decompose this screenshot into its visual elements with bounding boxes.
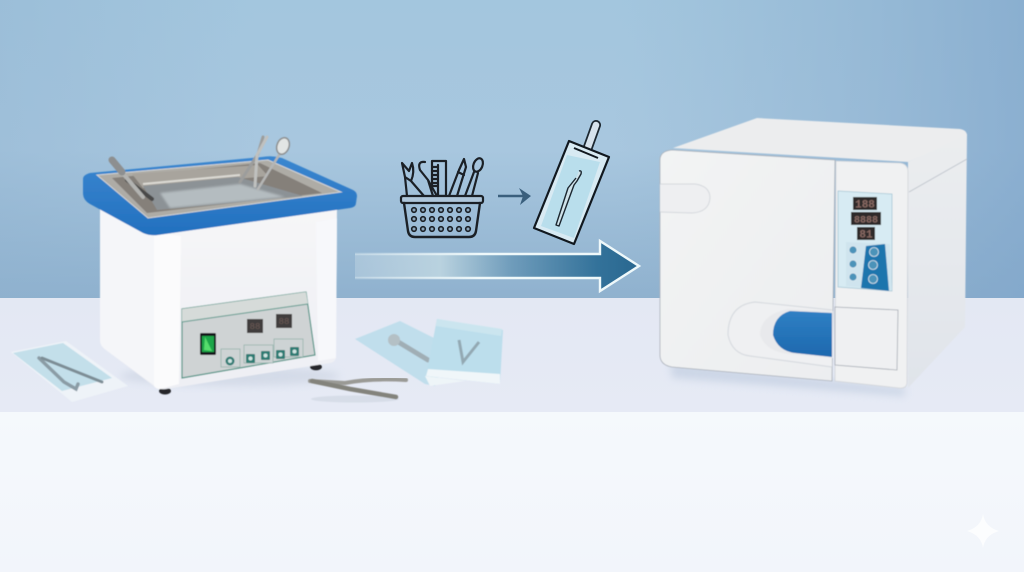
door handle [773,311,832,357]
keypad [846,242,892,291]
cleaner control panel [182,292,315,378]
sterile pouches: centre pair [355,319,503,386]
autoclave side [908,134,967,388]
arrow: large process arrow [355,241,639,291]
watermark sparkle [967,514,999,548]
blue rim and steel tank [83,156,357,235]
front pouch with forceps [426,319,503,384]
autoclave top [673,118,967,162]
arrow: basket to pouch [498,188,531,205]
back pouch with mirror [355,321,465,386]
icon: basket of instruments [401,157,485,237]
sterile pouch: left with forceps [11,341,128,402]
autoclave shadow [670,362,905,396]
autoclave sterilizer [660,118,967,396]
basket holes [412,208,470,231]
digital displays: 88 [250,322,260,332]
icon: sterile pouch with probe [534,125,609,244]
cleaner body [100,205,337,389]
scalpel [449,159,466,196]
loose forceps on table [310,379,406,402]
background: lower blank band [0,412,1024,572]
digital readouts: 81 [859,230,873,242]
panel buttons [221,339,303,367]
power switch [200,333,216,355]
ultrasonic cleaner [83,136,357,394]
pliers [402,163,424,196]
lower compartment [835,307,898,370]
basket body [401,196,483,203]
swab [465,172,478,196]
instruments in tank [112,136,292,199]
digital readouts: 8888 [854,216,878,226]
background: blue wall [0,0,1024,300]
background: table top [0,298,1024,413]
cleaner shadow [120,366,340,386]
autoclave door [660,150,835,381]
digital readouts: 188 [855,200,875,212]
cleaner feet [159,364,322,394]
probe [419,162,437,196]
control panel [838,191,892,291]
digital readouts [851,197,881,242]
autoclave control column [835,161,908,388]
digital displays: 88 [279,317,289,327]
comb [432,161,446,196]
digital displays [247,314,292,333]
